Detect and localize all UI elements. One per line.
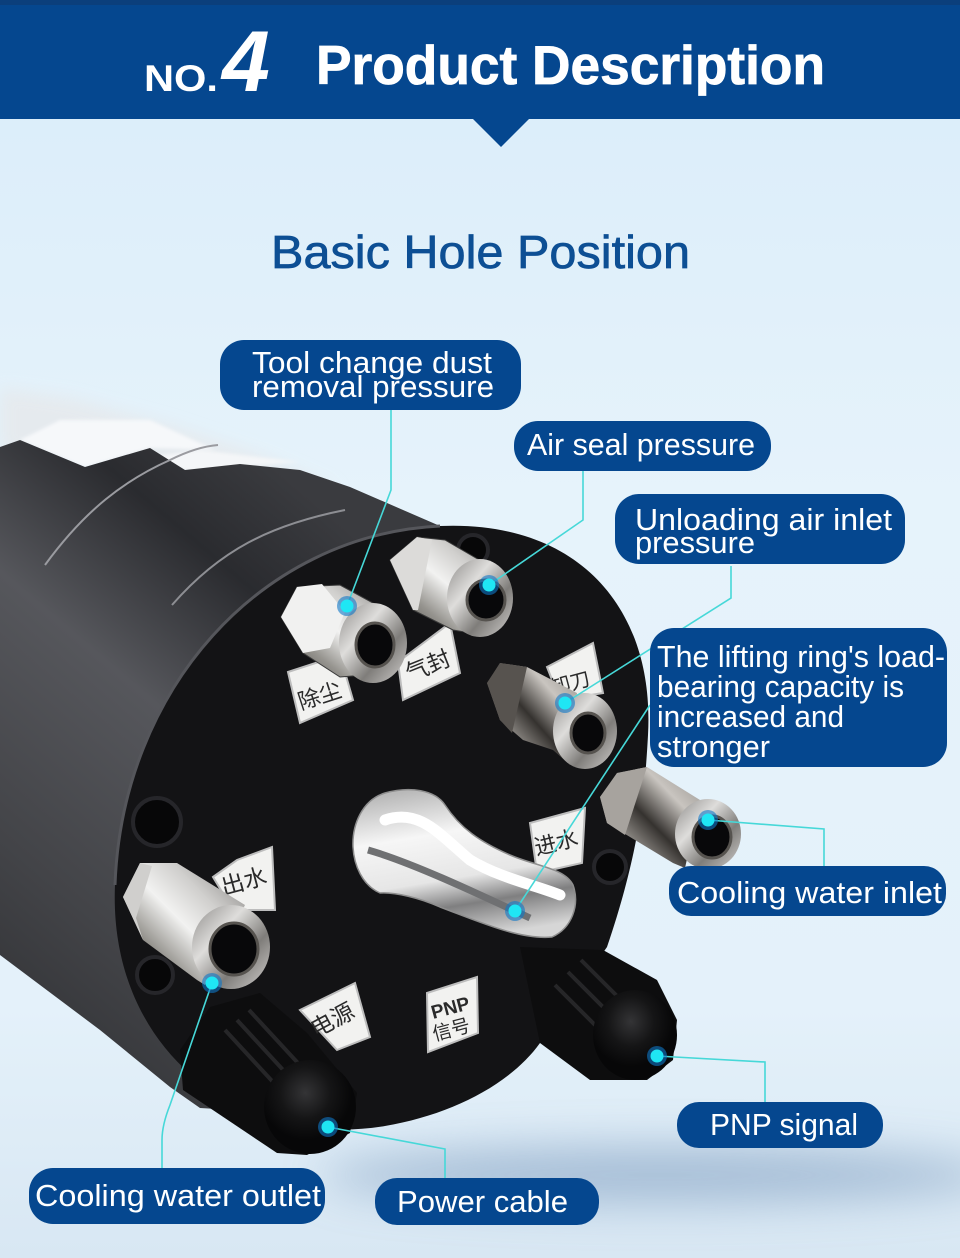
- callout: unloading air inlet pressure: pressure: [635, 525, 755, 560]
- sticker text: 除尘: [295, 677, 344, 715]
- callout: lifting ring load-bearing: increased and: [657, 699, 844, 734]
- end face: [115, 526, 648, 1130]
- spindle product photo: [0, 388, 741, 1155]
- sticker text: [218, 645, 593, 1046]
- sticker text: 出水: [218, 863, 270, 900]
- sticker text: PNP: [429, 993, 472, 1024]
- subtitle: Basic Hole Position: [271, 226, 690, 278]
- callout: tool change dust removal pressure: [220, 340, 521, 410]
- callout: cooling water outlet: Cooling water outlet: [35, 1178, 321, 1213]
- callout: tool change dust removal pressure: Tool change dust: [252, 345, 492, 380]
- header banner: [0, 0, 960, 147]
- callout: air seal pressure: Air seal pressure: [527, 427, 755, 462]
- leader lines: [162, 408, 824, 1180]
- sticker text: 信号: [430, 1015, 473, 1046]
- callout: lifting ring load-bearing: The lifting ring's load-: [657, 639, 945, 674]
- callout: air seal pressure: [514, 421, 771, 471]
- cable gland: PNP: [520, 947, 677, 1080]
- sticker text: 气封: [402, 645, 454, 686]
- stickers: [213, 623, 603, 1052]
- spindle body: [0, 440, 440, 1120]
- header number label: NO.: [144, 58, 218, 99]
- fitting: cooling water outlet: [123, 863, 270, 989]
- callout: cooling water inlet: Cooling water inlet: [677, 875, 942, 910]
- sticker text: 进水: [532, 825, 581, 860]
- fitting: air seal: [390, 537, 513, 637]
- sticker text: 电源: [306, 998, 359, 1042]
- screw holes: [133, 535, 626, 993]
- fitting: tool change dust removal: [281, 584, 407, 683]
- callout: unloading air inlet pressure: Unloading air inlet: [635, 502, 892, 537]
- callout: power cable: [375, 1178, 599, 1225]
- callout: unloading air inlet pressure: [615, 494, 905, 564]
- callout: cooling water outlet: [29, 1168, 325, 1224]
- callout dots: [202, 575, 718, 1137]
- soft white rear of spindle: [0, 388, 340, 490]
- callout: lifting ring load-bearing: stronger: [657, 729, 770, 764]
- body band grooves: [45, 445, 218, 565]
- header number label: 4: [220, 14, 270, 110]
- callout: lifting ring load-bearing: [650, 628, 947, 767]
- callout: lifting ring load-bearing: bearing capacity is: [657, 669, 904, 704]
- fitting: unloading air inlet: [487, 663, 617, 769]
- callout: cooling water inlet: [669, 866, 946, 916]
- callout: PNP signal: PNP signal: [710, 1107, 858, 1142]
- callout: PNP signal: [677, 1102, 883, 1148]
- header number label: [144, 14, 270, 110]
- fitting: cooling water inlet: [600, 767, 741, 869]
- floor shadow: [320, 1147, 960, 1203]
- sticker text: 卸刀: [548, 667, 593, 700]
- header title: Product Description: [316, 34, 825, 96]
- cable gland: power: [180, 993, 357, 1155]
- callout: tool change dust removal pressure: removal pressure: [252, 369, 494, 404]
- lifting ring: [353, 790, 575, 937]
- callout: power cable: Power cable: [397, 1184, 568, 1219]
